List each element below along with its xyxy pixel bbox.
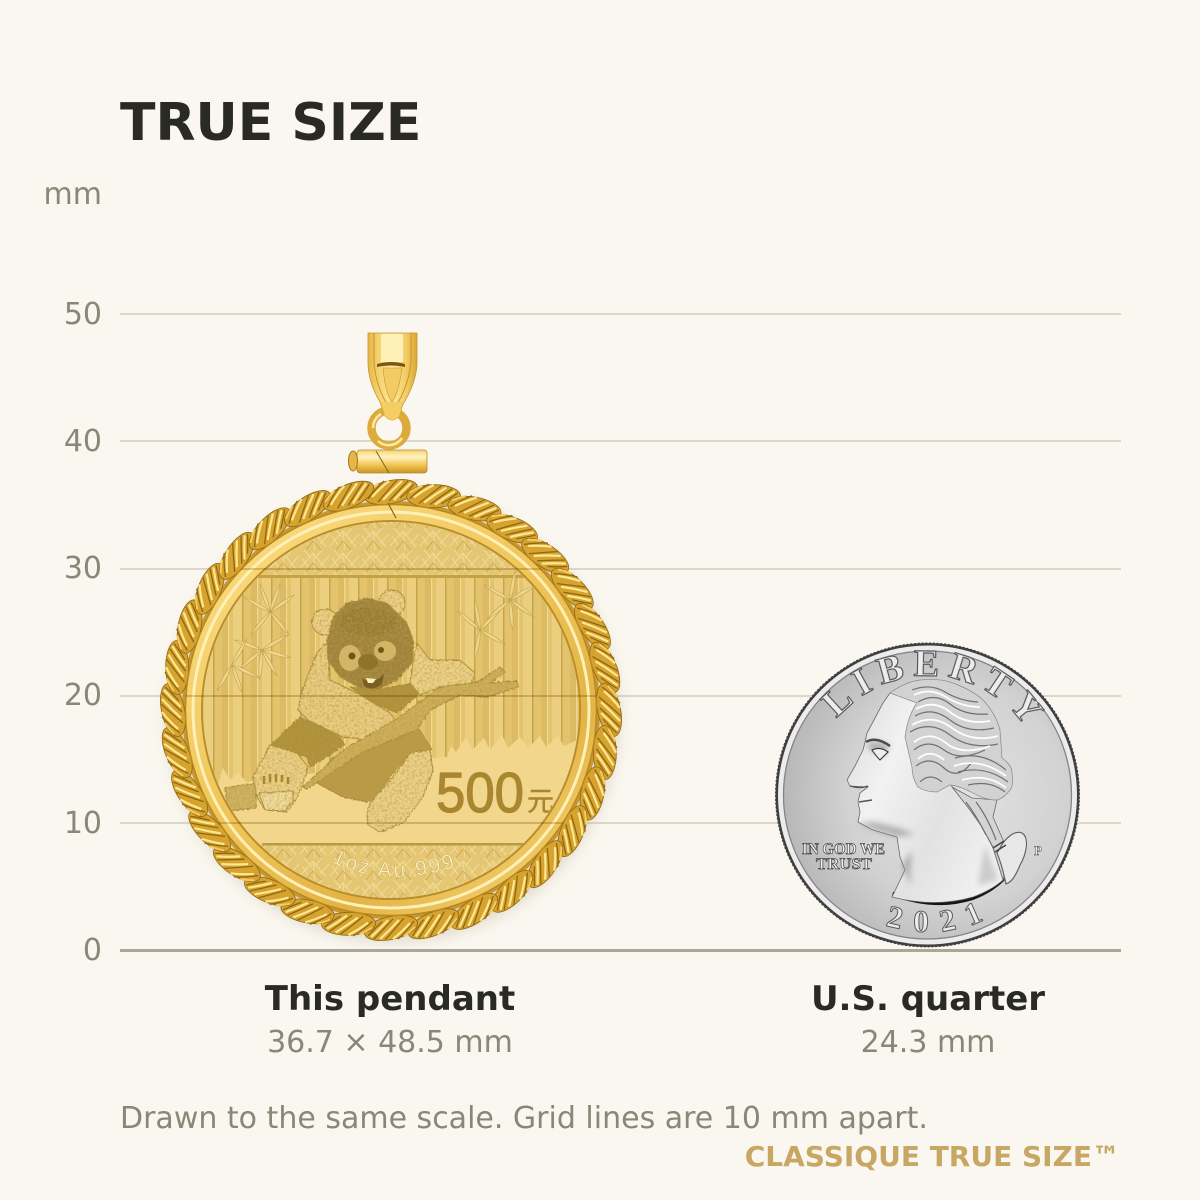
label: pendant: This pendant [265, 979, 515, 1019]
top clasp [348, 450, 427, 473]
Washington face and neck [847, 693, 1003, 902]
coin disc [775, 642, 1080, 948]
log stub [225, 783, 256, 811]
rope inner band [184, 503, 598, 917]
chest and belly [298, 642, 398, 740]
mint mark: P [1034, 843, 1042, 858]
grid lines showing through the pendant [186, 568, 596, 824]
y axis tick labels: 0 [83, 933, 102, 968]
panda [225, 590, 518, 832]
y axis tick labels [64, 297, 102, 968]
ground [218, 736, 576, 845]
mouth and nostril [850, 786, 872, 802]
bezel [186, 503, 596, 916]
coin face [203, 522, 579, 898]
bail tip [381, 402, 403, 420]
face details [339, 641, 396, 689]
toes [264, 774, 288, 784]
head sheen [340, 608, 396, 636]
foot pad [259, 791, 293, 811]
pendant image [160, 332, 624, 947]
U.S. quarter image [775, 642, 1080, 948]
brow [866, 740, 890, 746]
y axis tick labels: 40 [64, 424, 102, 459]
coin inscription: 1oz Au.999 [332, 851, 453, 878]
y axis tick labels: 20 [64, 678, 102, 713]
hair [890, 679, 1013, 840]
ribbon [997, 832, 1026, 884]
bottom leaf band [261, 845, 520, 898]
date: 2021 [886, 902, 984, 933]
eye [872, 748, 888, 760]
LIBERTY lettering: LIBERTY [819, 650, 1045, 722]
footnote: Drawn to the same scale. Grid lines are 10 mm apart. [120, 1101, 928, 1136]
soft shadow [167, 490, 619, 942]
lower dark body [317, 722, 432, 802]
reeded edge [775, 642, 1080, 948]
y axis tick labels: 30 [64, 551, 102, 586]
label: quarter: U.S. quarter [811, 979, 1045, 1019]
y axis tick labels: 50 [64, 297, 102, 332]
ears [312, 609, 338, 635]
ponytail [952, 787, 1008, 880]
left leg [253, 745, 308, 812]
bamboo forest [200, 577, 582, 792]
denomination: 500 [436, 761, 524, 825]
ring highlight [373, 414, 402, 445]
label: pendant: 36.7 × 48.5 mm [267, 1025, 513, 1060]
baseline axis [120, 949, 1121, 952]
bail [368, 333, 417, 420]
yuan sign: 元 [527, 787, 554, 817]
right leg [367, 750, 433, 832]
title: TRUE SIZE [120, 93, 421, 153]
y axis tick labels: 10 [64, 806, 102, 841]
bamboo leaves left [216, 583, 296, 694]
rope frame [155, 474, 627, 946]
motto line 2: TRUST [816, 856, 872, 873]
ribbon tie [993, 841, 1006, 852]
rim [780, 648, 1074, 942]
label: quarter [811, 979, 1045, 1060]
band line [258, 575, 524, 578]
jump ring [372, 410, 406, 446]
inner rim line [784, 651, 1072, 939]
bust shadow [892, 875, 1005, 905]
bamboo leaves right [456, 570, 537, 660]
brand line: CLASSIQUE TRUE SIZE™ [745, 1140, 1120, 1173]
shoulder dark [350, 683, 420, 713]
face shading [858, 741, 998, 885]
grid lines [120, 314, 1121, 823]
top leaf band [258, 522, 524, 577]
branch [303, 667, 518, 789]
hip dark [270, 717, 345, 767]
motto line 1: IN GOD WE [802, 841, 885, 858]
label: quarter: 24.3 mm [861, 1025, 995, 1060]
arm [410, 643, 475, 695]
label: pendant [265, 979, 515, 1060]
bottom band line [262, 843, 530, 846]
axis unit label: mm [44, 177, 102, 212]
head [327, 598, 414, 690]
